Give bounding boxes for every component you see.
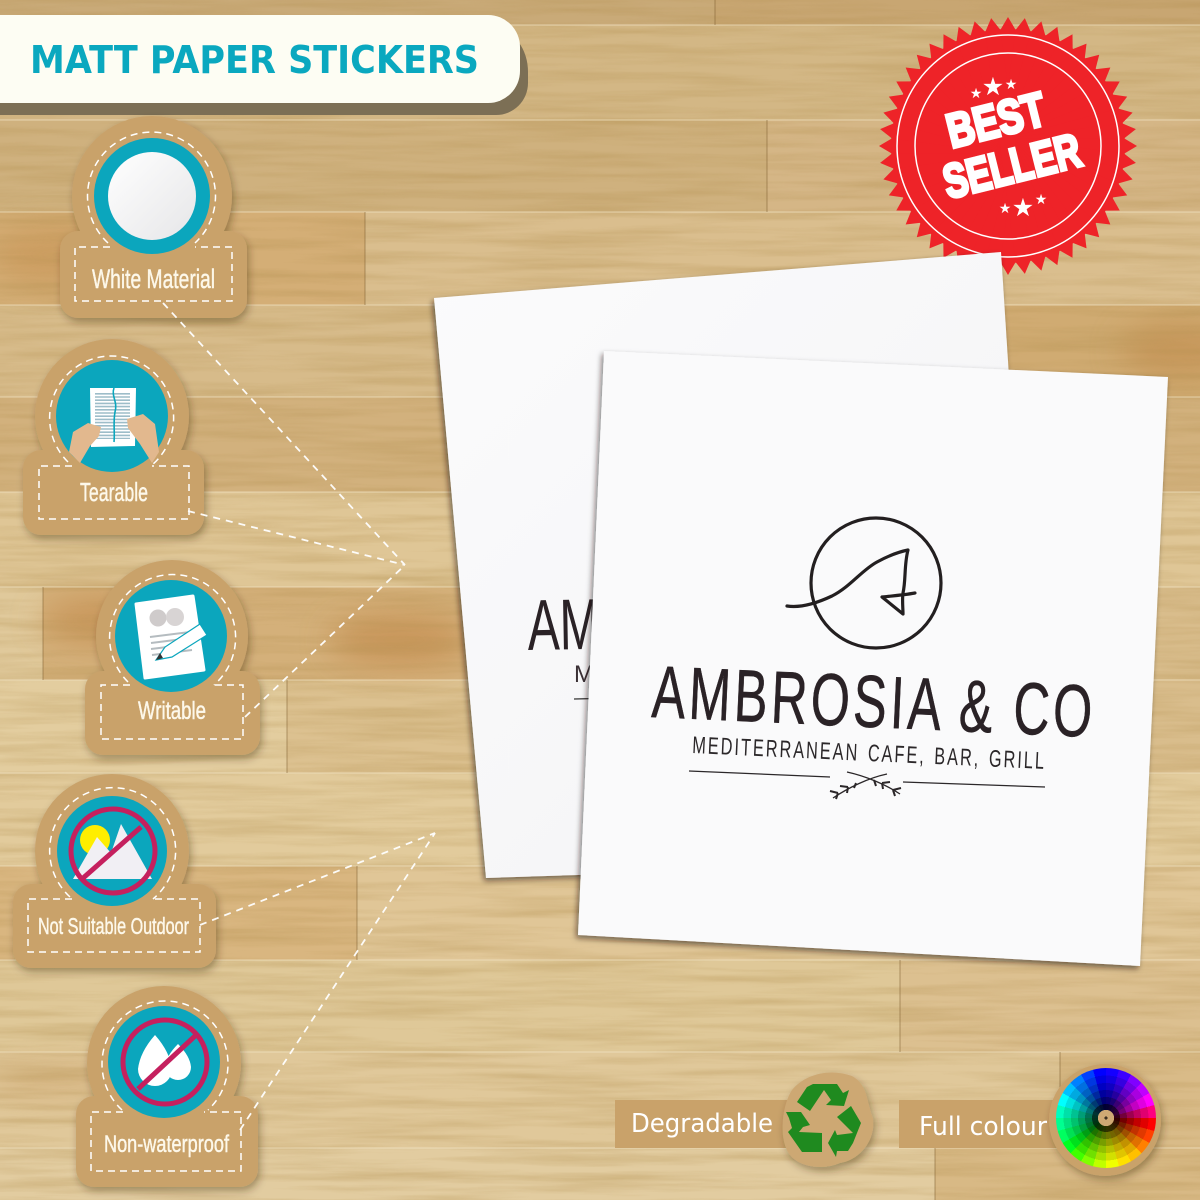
icon: paper and pencil: [136, 596, 207, 678]
icon: crossed out water drops: [123, 1020, 207, 1104]
seal text: [938, 83, 1087, 210]
badge: not suitable outdoor: [13, 774, 216, 968]
label: white material: White Material: [92, 264, 215, 294]
label: non-waterproof: Non-waterproof: [104, 1131, 229, 1158]
badge: tearable: [23, 339, 204, 535]
title text: MATT PAPER STICKERS: [30, 38, 479, 83]
brand tagline: MEDITERRANEAN CAFE, BAR, GRILL: [692, 732, 1047, 775]
label: not suitable outdoor: Not Suitable Outdoor: [38, 913, 189, 939]
back sheet: ME: [574, 661, 610, 688]
seal stars: ★: [1012, 193, 1034, 222]
title banner: [0, 15, 528, 115]
seal text: BEST: [941, 83, 1051, 159]
tag: degradable: [615, 1072, 873, 1167]
icon: crossed out mountains: [71, 809, 155, 893]
icon: white disc: [108, 152, 196, 240]
back sheet: AM: [527, 585, 600, 666]
dashed connector lines: [163, 303, 435, 1130]
tag: full colour: [899, 1064, 1161, 1176]
divider lines and olive sprigs: [689, 771, 1045, 799]
badge: writable: [85, 560, 260, 755]
sticker sheets: [434, 252, 1168, 966]
icon: tearing paper with hands: [69, 388, 159, 463]
seal stars: [970, 72, 1047, 222]
seal starburst: [879, 17, 1137, 275]
seal stars: ★: [982, 72, 1004, 101]
logo emblem: [787, 518, 941, 648]
label: tearable: Tearable: [80, 477, 148, 507]
badge: non-waterproof: [76, 986, 258, 1187]
seal stars: ★: [970, 86, 982, 102]
label: writable: Writable: [138, 697, 206, 725]
label: degradable: Degradable: [631, 1109, 773, 1139]
seal stars: ★: [999, 201, 1011, 217]
icon: colour wheel: [1056, 1068, 1156, 1168]
best seller seal: [879, 17, 1137, 275]
label: full colour: Full colour: [919, 1112, 1047, 1142]
front sheet: [578, 351, 1168, 966]
back sheet: [434, 252, 1040, 878]
seal stars: ★: [1035, 192, 1047, 208]
seal text: SELLER: [938, 124, 1087, 210]
badge: white material: [60, 116, 247, 318]
seal stars: ★: [1005, 77, 1017, 93]
icon: recycle symbol: [783, 1072, 873, 1167]
